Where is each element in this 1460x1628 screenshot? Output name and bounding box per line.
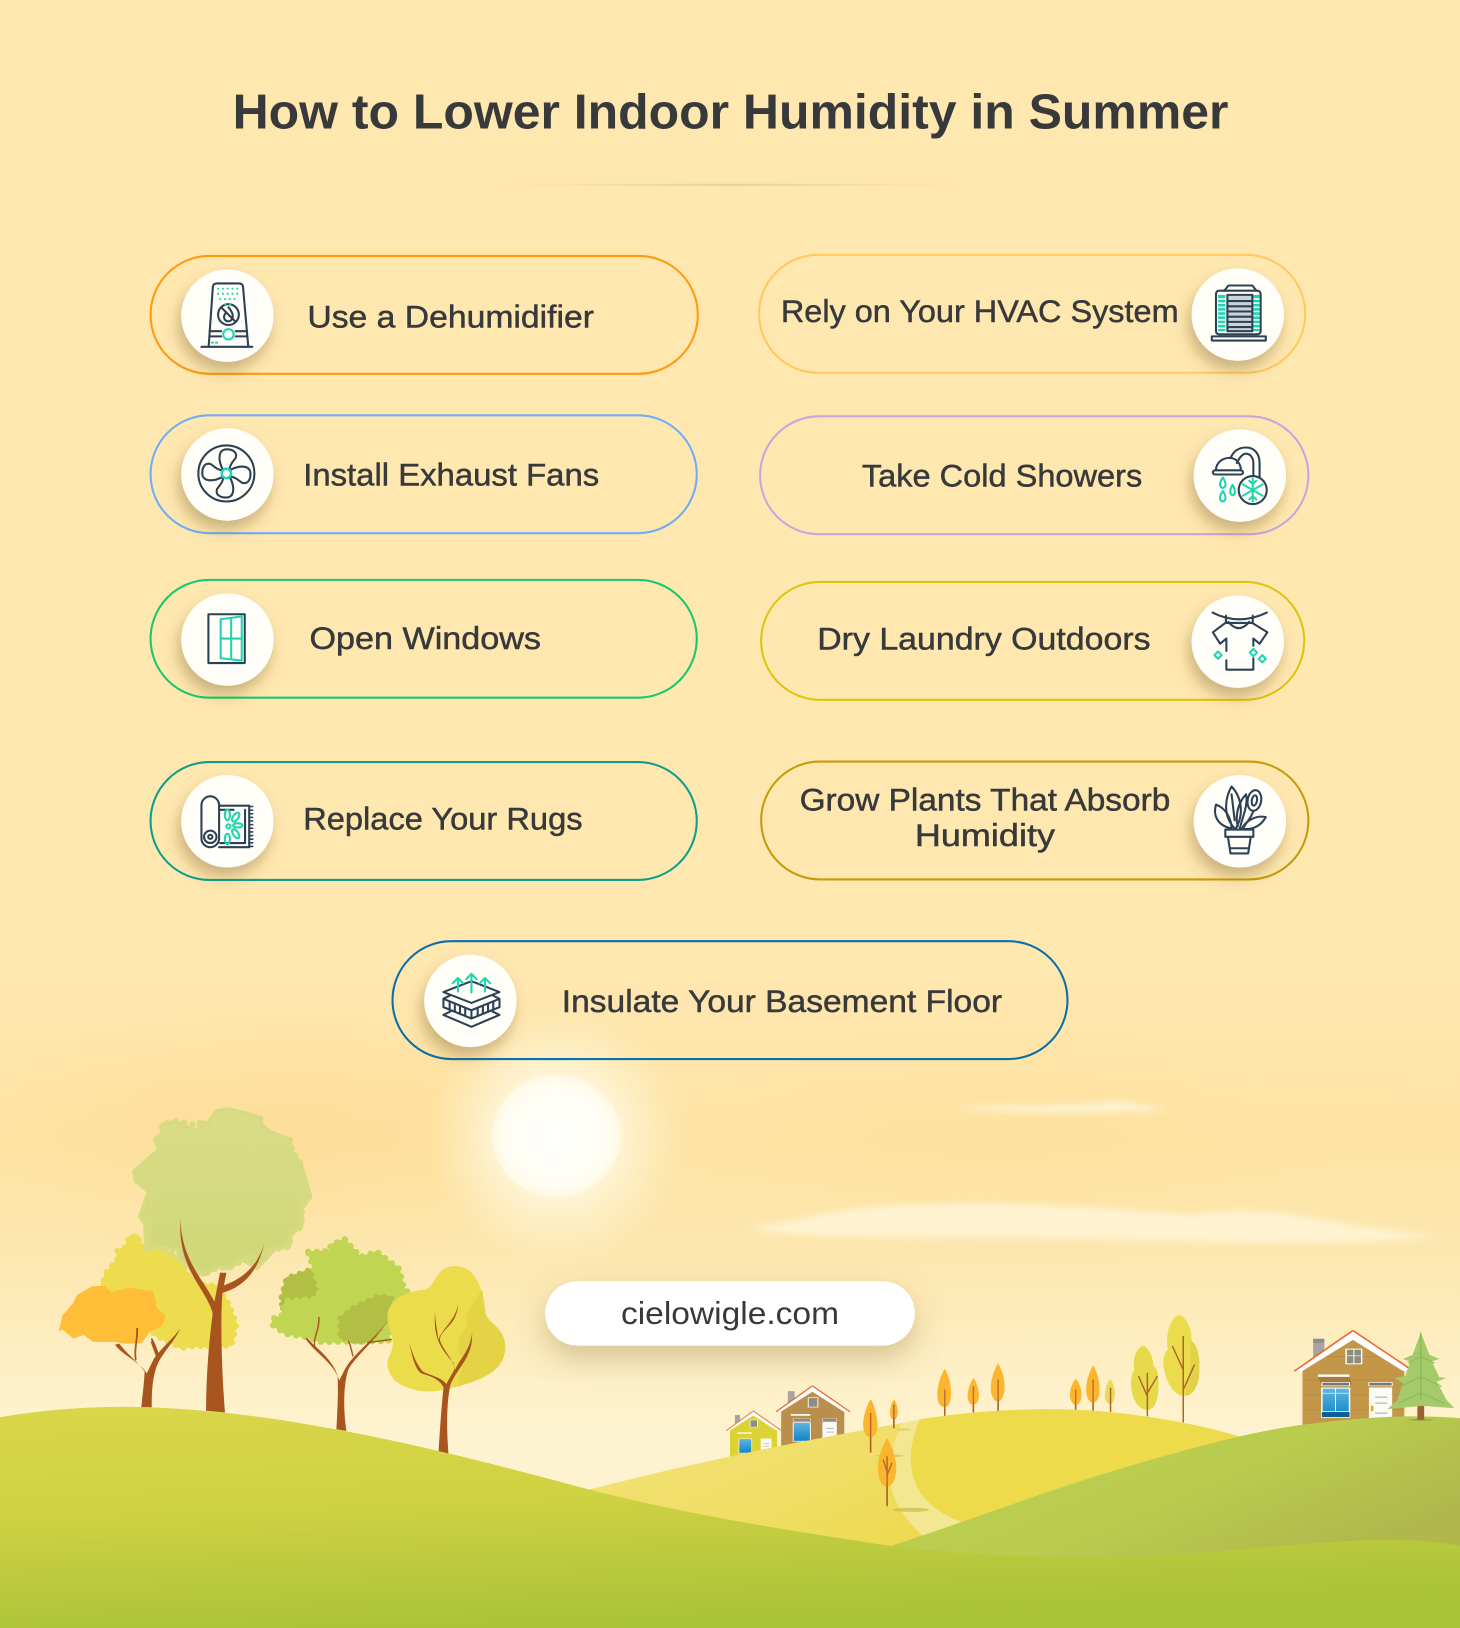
- pale hill: [589, 1419, 923, 1563]
- icon: dehumidifier: [201, 283, 252, 347]
- tree: big pale green tree crown: [134, 1109, 311, 1275]
- background hills, houses and small trees: [589, 1315, 1460, 1563]
- icon: rug: [201, 796, 251, 847]
- icon: window: [208, 614, 245, 663]
- label second line: Humidity: [915, 818, 1056, 853]
- item: Use a Dehumidifier: [151, 256, 698, 374]
- icon: laundry shirt: [1213, 613, 1267, 670]
- label: Replace Your Rugs: [303, 802, 583, 837]
- title: How to Lower Indoor Humidity in Summer: [233, 86, 1228, 140]
- item: Install Exhaust Fans: [151, 415, 697, 533]
- yellow hill: [910, 1409, 1245, 1543]
- icon: fan: [198, 445, 254, 501]
- tree: yellow round tree: [387, 1266, 505, 1454]
- item: Dry Laundry Outdoors: [761, 582, 1304, 700]
- green hill: [891, 1416, 1460, 1563]
- website badge: cielowigle.com: [621, 1296, 839, 1331]
- label: Grow Plants That Absorb: [800, 782, 1170, 817]
- clouds: [748, 1101, 1438, 1242]
- pine tree: [1387, 1332, 1454, 1421]
- path lane: [890, 1420, 962, 1535]
- icon: cold shower: [1213, 447, 1267, 504]
- label: Rely on Your HVAC System: [781, 294, 1179, 329]
- small trees on ridge: [937, 1315, 1199, 1422]
- item: Grow Plants That Absorb Humidity: [761, 762, 1308, 879]
- item: Replace Your Rugs: [151, 762, 697, 880]
- icon: plant: [1215, 786, 1266, 853]
- website badge: [545, 1281, 915, 1346]
- tree: big trunk: [180, 1220, 265, 1413]
- tree: orange tree: [60, 1287, 180, 1407]
- label: Take Cold Showers: [862, 458, 1142, 493]
- item: Open Windows: [151, 580, 697, 698]
- house: large brown: [1294, 1330, 1414, 1433]
- label: Insulate Your Basement Floor: [562, 984, 1002, 1019]
- item: Insulate Your Basement Floor: [393, 941, 1067, 1059]
- trees on slope: [863, 1399, 929, 1512]
- house: medium brown: [776, 1386, 850, 1453]
- item: Rely on Your HVAC System: [759, 255, 1305, 373]
- item: Take Cold Showers: [760, 416, 1308, 534]
- sun: [427, 1006, 686, 1266]
- label: Open Windows: [309, 621, 541, 656]
- icon: insulation layers: [443, 974, 499, 1027]
- sky glow: [0, 1002, 1340, 1267]
- label: Install Exhaust Fans: [303, 457, 599, 492]
- tree: yellow bush tree: [101, 1235, 237, 1358]
- title divider: [498, 184, 966, 186]
- tree: green tree: [272, 1239, 409, 1431]
- label: Dry Laundry Outdoors: [817, 621, 1151, 656]
- label: Use a Dehumidifier: [307, 300, 594, 335]
- house: small yellow: [726, 1411, 781, 1462]
- large tree cluster: [60, 1109, 505, 1454]
- front hill: [0, 1407, 1460, 1628]
- icon: HVAC unit: [1212, 286, 1266, 341]
